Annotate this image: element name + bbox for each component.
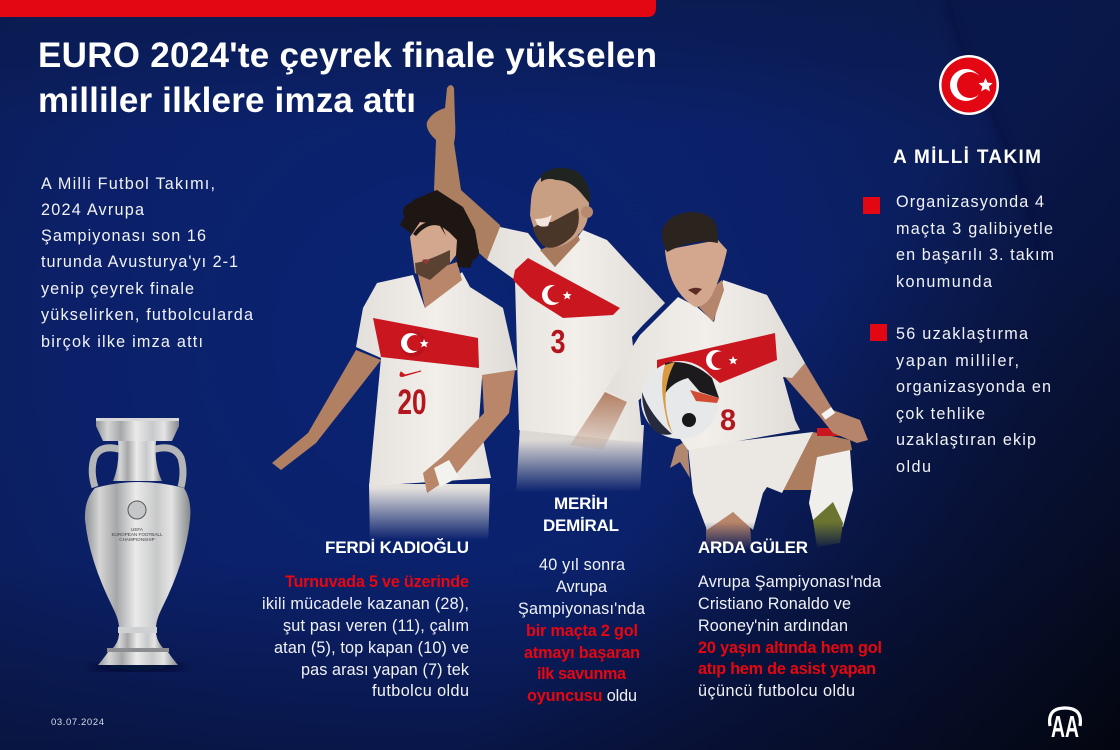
red band [513,258,620,318]
red band [373,318,479,368]
text: Merih Demiral: ilk savunma [537,665,627,683]
bullet: second: oldu [896,458,931,476]
neck and face [698,280,724,322]
red detail behind hand [817,428,840,436]
bullet: second: organizasyonda en [896,378,1051,396]
intro paragraph: 2024 Avrupa [41,201,144,219]
boot [813,502,843,547]
shorts [516,425,644,495]
hair [400,190,479,268]
ball [641,361,719,439]
text: Merih Demiral: Şampiyonası'nda [518,600,645,618]
text: Merih Demiral: atmayı başaran [524,644,640,662]
face [530,172,589,248]
bullet: first: maçta 3 galibiyetle [896,220,1053,238]
right arm [423,370,515,493]
intro paragraph: yenip çeyrek finale [41,280,194,298]
raised arm [427,85,503,260]
shorts [369,484,490,538]
intro paragraph: Şampiyonası son 16 [41,227,206,245]
neck [540,233,580,267]
left arm of Arda [570,392,627,450]
jersey [605,280,805,450]
date: 03.07.2024 [51,717,104,728]
text: Arda Güler: Avrupa Şampiyonası'nda [698,573,881,591]
player: Arda Güler [605,212,868,552]
crest [400,331,429,357]
heading: A Milli Takım: A MİLLİ TAKIM [893,147,1041,168]
bullet: second: 56 uzaklaştırma [896,325,1028,343]
player: Ferdi Kadıoğlu [272,190,517,548]
icon: trophy: UEFA [131,527,144,532]
text: Ferdi Kadıoğlu: ikili mücadele kazanan (28), [262,595,469,613]
far hand [670,440,690,478]
title: EURO 2024'te çeyrek finale yükselen [38,36,657,75]
red band [657,333,777,383]
bullet: first: konumunda [896,273,992,291]
bullet: first: en başarılı 3. takım [896,246,1054,264]
text: Merih Demiral: oyuncusu oldu [527,687,637,705]
number 20: 20 [398,383,426,422]
icon: trophy: CHAMPIONSHIP [119,537,155,542]
logo: Anadolu Agency [1050,708,1080,744]
swoosh [400,371,421,376]
intro paragraph: yükselirken, futbolcularda [41,306,253,324]
bullet: first: Organizasyonda 4 [896,193,1044,211]
intro paragraph [41,175,253,351]
thigh [782,432,852,490]
crest [706,350,738,370]
heading: Arda Güler: ARDA GÜLER [698,538,808,557]
sock [809,450,853,527]
number 3: 3 [550,323,566,360]
face [410,222,457,280]
intro paragraph: A Milli Futbol Takımı, [41,175,215,193]
shorts [688,432,813,530]
right arm [785,363,868,443]
number 8: 8 [720,404,736,437]
jersey [487,227,665,443]
player: Merih Demiral [427,85,665,495]
bullet: second [870,324,1051,476]
text: Merih Demiral: bir maçta 2 gol [526,622,638,640]
bullet: second: yapan milliler, [896,352,1019,370]
heading: Merih Demiral: DEMİRAL [543,516,619,535]
text: Ferdi Kadıoğlu [262,573,470,700]
crest [542,285,572,305]
intro paragraph: turunda Avusturya'yı 2-1 [41,253,238,271]
text: Arda Güler: 20 yaşın altında hem gol [698,639,882,657]
text: Ferdi Kadıoğlu: şut pası veren (11), çalım [283,617,469,635]
top red bar [0,0,656,17]
text: Ferdi Kadıoğlu: futbolcu oldu [372,682,469,700]
jersey [356,272,517,486]
text: Merih Demiral: 40 yıl sonra [539,556,625,574]
text: Ferdi Kadıoğlu: Turnuvada 5 ve üzerinde [285,573,469,591]
text: Arda Güler: atıp hem de asist yapan [698,660,876,678]
intro paragraph: birçok ilke imza attı [41,333,203,351]
icon: trophy: EUROPEAN FOOTBALL [111,532,163,537]
text: Arda Güler [698,573,882,700]
title: milliler ilklere imza attı [38,81,416,120]
icon: trophy [85,418,190,671]
text: Arda Güler: Rooney'nin ardından [698,617,848,635]
title [38,36,657,120]
bullet: second: uzaklaştıran ekip [896,431,1036,449]
logo: Anadolu Agency: AA [1051,709,1079,744]
text: Arda Güler: üçüncü futbolcu oldu [698,682,855,700]
text: Merih Demiral [518,556,645,705]
text: Ferdi Kadıoğlu: atan (5), top kapan (10) ve [274,639,469,657]
bandage [434,460,459,487]
text: Ferdi Kadıoğlu: pas arası yapan (7) tek [301,661,470,679]
text: Arda Güler: Cristiano Ronaldo ve [698,595,851,613]
heading: Merih Demiral [543,494,619,535]
heading: Merih Demiral: MERİH [554,494,608,513]
neck [418,262,462,308]
bullet: second: çok tehlike [896,405,985,423]
text: Merih Demiral: Avrupa [556,578,607,596]
bullet: first [863,193,1054,291]
left arm [272,350,381,470]
heading: Ferdi Kadıoğlu: FERDİ KADIOĞLU [325,538,469,557]
icon: Turkish flag [939,55,999,115]
